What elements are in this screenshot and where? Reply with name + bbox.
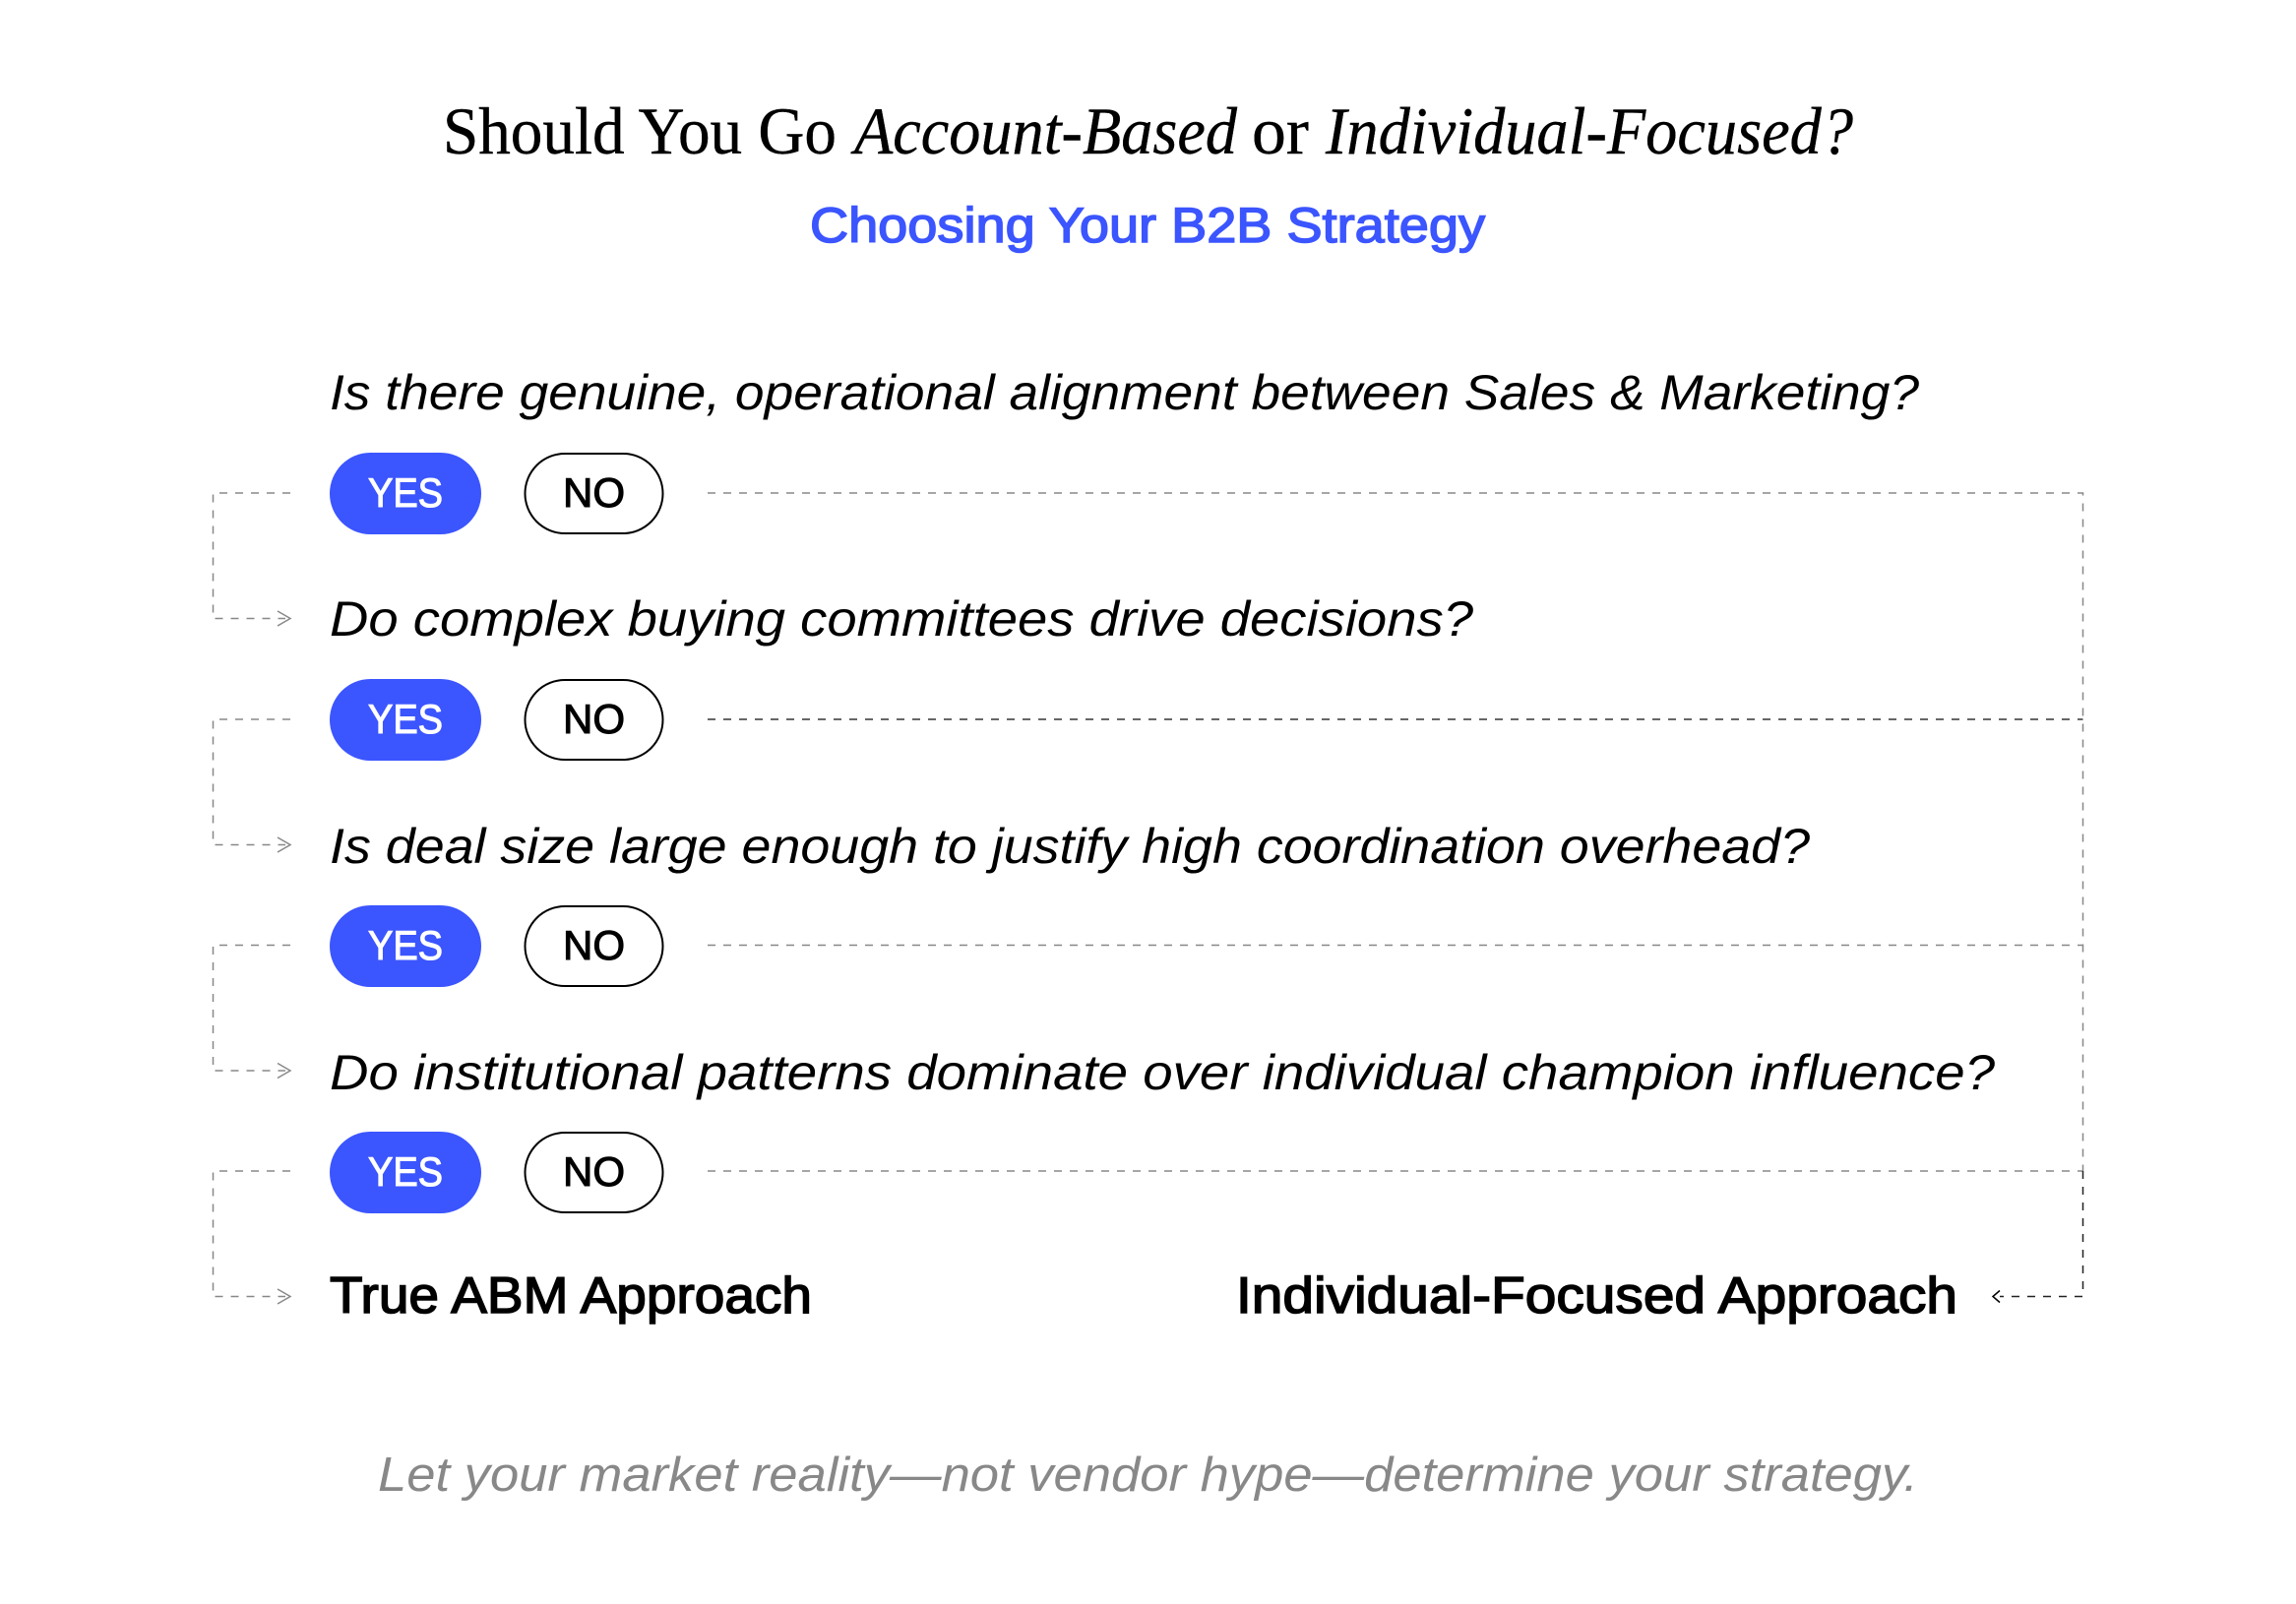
- yes/no buttons row 4: [330, 1132, 663, 1213]
- yes/no buttons row 2: [330, 679, 663, 761]
- arrow: yes from question 1 to question 2: [213, 493, 290, 626]
- outcome: true ABM approach: True ABM Approach: [330, 1267, 812, 1325]
- arrow: yes from question 4 to true ABM approach: [213, 1171, 290, 1304]
- question 2: Do complex buying committees drive decisions?: [330, 591, 1473, 647]
- footer note: Let your market reality—not vendor hype—determine your strategy.: [378, 1449, 1918, 1502]
- yes/no buttons row 1: [330, 453, 663, 534]
- title: or: [1252, 93, 1309, 168]
- question 1: Is there genuine, operational alignment between Sales & Marketing?: [330, 365, 1919, 420]
- yes/no buttons row 2: YES: [368, 696, 443, 742]
- yes/no buttons row 3: NO: [563, 922, 625, 968]
- arrow: yes from question 3 to question 4: [213, 945, 290, 1079]
- title: Individual-Focused?: [1325, 93, 1853, 168]
- yes/no buttons row 4: NO: [563, 1148, 625, 1195]
- yes/no buttons row 1: YES: [368, 469, 443, 516]
- outcome: individual-focused approach: Individual-Focused Approach: [1236, 1267, 1957, 1325]
- arrow: yes from question 2 to question 3: [213, 719, 290, 852]
- title: [443, 93, 1853, 168]
- yes/no buttons row 1: NO: [563, 469, 625, 516]
- yes/no buttons row 3: [330, 905, 663, 987]
- yes/no buttons row 3: YES: [368, 922, 443, 968]
- question 4: Do institutional patterns dominate over individual champion influence?: [330, 1045, 1995, 1100]
- yes/no buttons row 4: YES: [368, 1148, 443, 1195]
- title: Should You Go: [443, 93, 837, 168]
- subtitle: Choosing Your B2B Strategy: [810, 198, 1485, 253]
- arrow: no answers to individual-focused approach: [708, 493, 2082, 1303]
- yes/no buttons row 2: NO: [563, 696, 625, 742]
- question 3: Is deal size large enough to justify high coordination overhead?: [330, 819, 1810, 874]
- title: Account-Based: [850, 93, 1238, 168]
